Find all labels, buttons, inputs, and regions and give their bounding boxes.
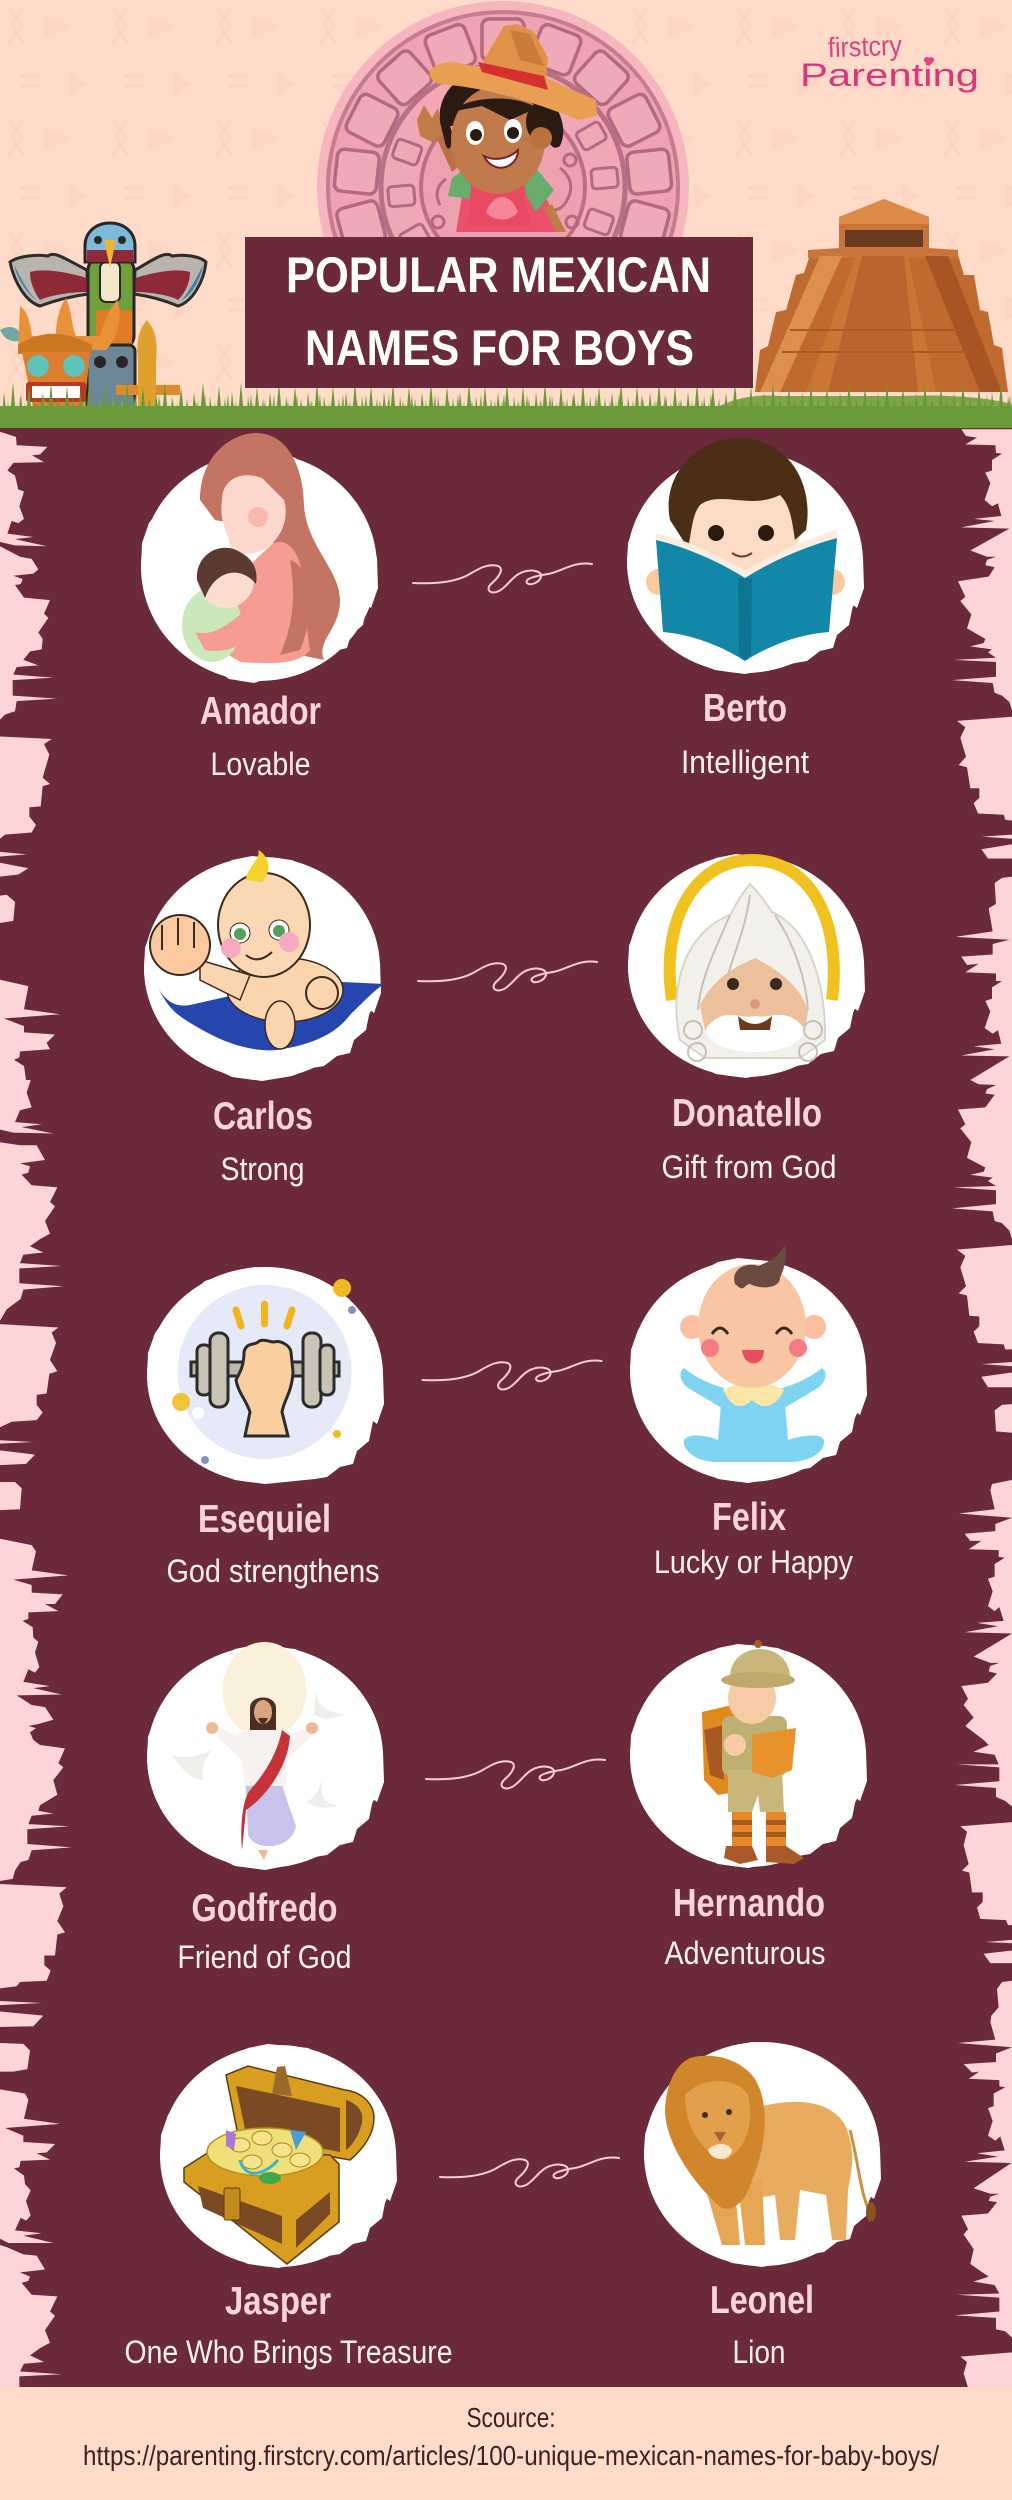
- white brush circle: [628, 854, 865, 1078]
- meaning: Lucky or Happy: [654, 1544, 853, 1580]
- name: Amador: [200, 690, 321, 733]
- meaning: Adventurous: [664, 1935, 826, 1971]
- icon: God with halo: [670, 860, 834, 1061]
- card: Berto: [627, 438, 864, 780]
- meaning: One Who Brings Treasure: [124, 2334, 452, 2370]
- card: Donatello: [628, 854, 865, 1185]
- illustration: totem pole: [0, 223, 206, 415]
- meaning: Intelligent: [681, 744, 809, 780]
- white brush circle: [141, 451, 378, 683]
- meaning: Strong: [220, 1151, 304, 1187]
- card: Felix: [630, 1245, 867, 1580]
- icon: happy baby: [680, 1245, 826, 1462]
- white brush circle: [630, 1644, 867, 1868]
- meaning: Lion: [732, 2334, 786, 2370]
- name: Leonel: [710, 2279, 814, 2322]
- grass strip: [0, 378, 1012, 429]
- logo: FirstCry Parenting: Parenting: [800, 57, 979, 93]
- meaning: Gift from God: [662, 1149, 836, 1185]
- name: Godfredo: [192, 1887, 338, 1930]
- meaning: Friend of God: [178, 1939, 352, 1975]
- header background: [0, 0, 1012, 430]
- connector squiggle: [413, 563, 592, 592]
- card: Hernando: [630, 1640, 867, 1971]
- card: Leonel: [644, 2042, 881, 2370]
- white brush circle: [147, 1267, 384, 1484]
- white brush circle: [144, 856, 381, 1081]
- illustration: Mayan pyramid: [755, 199, 1008, 392]
- white brush circle: [630, 1258, 867, 1483]
- meaning: Lovable: [210, 746, 310, 782]
- card: Amador: [141, 433, 378, 782]
- card: Godfredo: [147, 1642, 384, 1975]
- left torn edge: [0, 432, 72, 2387]
- illustration: boy with sombrero: [417, 24, 597, 232]
- maroon main panel: [0, 428, 1012, 2388]
- name: Jasper: [225, 2280, 331, 2323]
- connector squiggle: [422, 1360, 602, 1389]
- icon: lion: [665, 2056, 876, 2245]
- white brush circle: [627, 451, 864, 674]
- source footer: [0, 2387, 1012, 2500]
- card: Jasper: [124, 2044, 452, 2370]
- logo: FirstCry Parenting: [800, 30, 979, 93]
- logo: FirstCry Parenting: firstcry: [827, 30, 902, 63]
- connector squiggle: [418, 961, 597, 990]
- name: Berto: [703, 687, 787, 730]
- medallion: Aztec calendar: [317, 1, 689, 373]
- card: Esequiel: [147, 1267, 384, 1589]
- title banner: [245, 237, 753, 388]
- card: Carlos: [144, 850, 384, 1187]
- white brush circle: [644, 2042, 881, 2267]
- white brush circle: [147, 1645, 384, 1870]
- title banner: NAMES FOR BOYS: [305, 320, 694, 376]
- name: Felix: [712, 1496, 786, 1539]
- connector squiggle: [426, 1759, 605, 1788]
- icon: mother and baby: [182, 433, 340, 663]
- name: Hernando: [673, 1882, 825, 1925]
- icon: boy reading a book: [646, 438, 845, 661]
- right torn edge: [952, 429, 1012, 2387]
- white brush circle: [160, 2044, 397, 2268]
- name: Esequiel: [198, 1498, 331, 1541]
- meaning: God strengthens: [166, 1553, 380, 1589]
- source footer: Scource:: [466, 2402, 556, 2433]
- icon: Jesus with doves: [172, 1642, 344, 1860]
- name: Donatello: [672, 1092, 822, 1135]
- icon: treasure chest: [184, 2066, 374, 2264]
- name: Carlos: [213, 1095, 313, 1138]
- icon: superhero baby: [150, 850, 384, 1050]
- connector squiggle: [440, 2157, 619, 2186]
- icon: explorer boy: [702, 1640, 804, 1864]
- icon: fist lifting dumbbell: [172, 1279, 356, 1464]
- title banner: POPULAR MEXICAN: [286, 247, 711, 303]
